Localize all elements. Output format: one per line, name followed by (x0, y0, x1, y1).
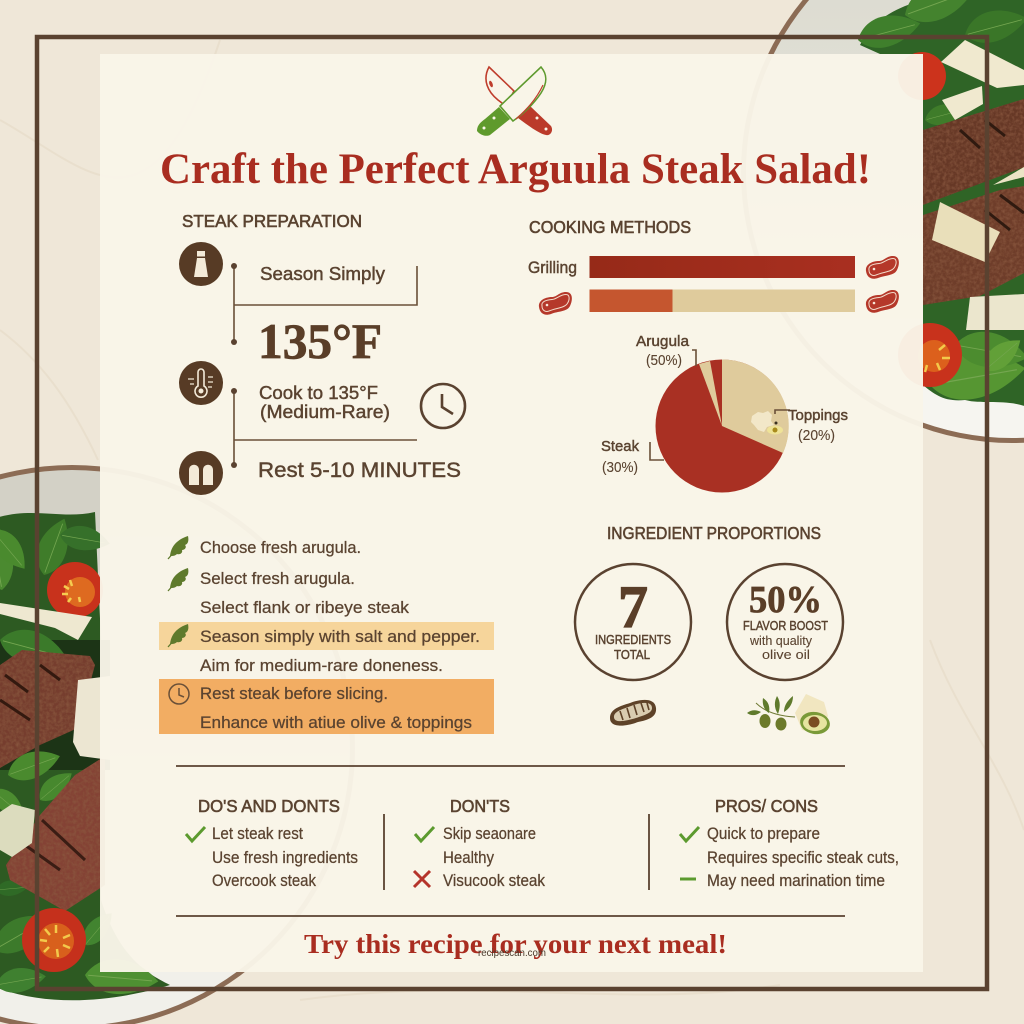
icon: cheese and avocado (751, 411, 783, 434)
bar: grilling (590, 256, 855, 278)
column: don'ts: DON'TS (450, 796, 510, 816)
photo: salad plate top right (741, 0, 1024, 443)
column: pros and cons: Requires specific steak cuts, (707, 849, 899, 867)
icon: dash (680, 878, 696, 880)
label: steak: (30%) (602, 459, 638, 476)
heading: steak preparation: STEAK PREPARATION (182, 211, 362, 231)
column: pros and cons (680, 796, 899, 890)
label: grilling: Grilling (528, 259, 577, 277)
stat: 7 ingredients: 7 (618, 574, 648, 640)
label: steak: Steak (601, 438, 639, 455)
stat: 50% flavor boost: with quality (749, 633, 812, 648)
icon: small clock (169, 684, 189, 704)
icon: leaf bullets (168, 536, 188, 647)
icon: grilled steak (610, 700, 656, 726)
watermark: recipescan.com (478, 948, 546, 959)
highlight band two (159, 679, 494, 734)
column: don'ts: Healthy (443, 849, 495, 867)
icon: salt and pepper (179, 451, 223, 495)
column: do's and donts: DO'S AND DONTS (198, 796, 340, 816)
heading: cooking methods: COOKING METHODS (529, 217, 691, 237)
column: don'ts: Skip seaonare (443, 825, 536, 843)
column: don'ts (414, 796, 546, 890)
step: cook to temperature: Cook to 135°F (259, 382, 378, 403)
column: don'ts: Visucook steak (443, 872, 546, 890)
icon: thermometer (179, 361, 223, 405)
label: toppings: (20%) (798, 427, 835, 444)
stat: 50% flavor boost: olive oil (762, 647, 810, 662)
checklist text: Aim for medium-rare doneness. (200, 657, 443, 675)
column: pros and cons: May need marination time (707, 872, 885, 890)
column: do's and donts: Overcook steak (212, 872, 317, 890)
pie chart: ingredient proportions (601, 333, 848, 492)
step: rest: Rest 5-10 MINUTES (258, 458, 461, 482)
photo: salad plate bottom left (0, 465, 245, 1024)
checklist text: Season simply with salt and pepper. (200, 628, 480, 646)
content panel (100, 54, 923, 972)
column: pros and cons: PROS/ CONS (715, 796, 818, 816)
checklist text: Enhance with atiue olive & toppings (200, 714, 472, 732)
icon: salt shaker (179, 242, 223, 286)
leader lines (650, 350, 790, 460)
icon: check (415, 827, 434, 841)
icon: olives, cheese and avocado (747, 694, 832, 736)
icon: check (186, 827, 205, 841)
step: season simply: Season Simply (260, 263, 386, 284)
big number: 135°F: 135°F (258, 313, 382, 369)
icon: crossed knives (477, 67, 552, 136)
checklist: preparation tips (159, 536, 494, 734)
timeline connector one (231, 263, 417, 345)
timeline connector two (231, 388, 417, 468)
heading: ingredient proportions: INGREDIENT PROPORTIONS (607, 523, 821, 543)
label: arugula (636, 333, 690, 369)
stat: 7 ingredients: TOTAL (614, 648, 650, 662)
checklist text (200, 539, 480, 732)
footer call to action: Try this recipe for your next meal! (304, 929, 727, 959)
title: Craft the Perfect Arguula Steak Salad! (160, 146, 871, 193)
section: steak preparation (179, 211, 465, 495)
step: cook to temperature (259, 382, 390, 422)
section: cooking methods (528, 217, 899, 315)
icon: clock (421, 384, 465, 428)
checklist text: Choose fresh arugula. (200, 539, 361, 557)
checklist text: Rest steak before slicing. (200, 685, 388, 703)
stat: 50% flavor boost: FLAVOR BOOST (743, 618, 828, 633)
label: toppings (788, 407, 848, 444)
label: arugula: (50%) (646, 352, 682, 369)
stat: 7 ingredients (575, 564, 691, 680)
label: steak (601, 438, 639, 476)
column: pros and cons: Quick to prepare (707, 825, 820, 843)
icon: check (680, 827, 699, 841)
label: arugula: Arugula (636, 333, 690, 350)
checklist text: Select flank or ribeye steak (200, 599, 410, 617)
stat: 7 ingredients: INGREDIENTS (595, 633, 671, 647)
bar: second method (590, 290, 855, 312)
label: toppings: Toppings (788, 407, 848, 424)
icon: cross (414, 871, 430, 887)
checklist text: Select fresh arugula. (200, 570, 355, 588)
icon: steak cuts (539, 256, 899, 315)
step: cook to temperature: (Medium-Rare) (260, 401, 390, 422)
stat: 50% flavor boost: 50% (749, 579, 822, 621)
column: do's and donts: Use fresh ingredients (212, 849, 358, 867)
highlight band one (159, 622, 494, 650)
stat: 50% flavor boost (727, 564, 843, 680)
column: do's and donts: Let steak rest (212, 825, 303, 843)
column: do's and donts (186, 796, 358, 890)
